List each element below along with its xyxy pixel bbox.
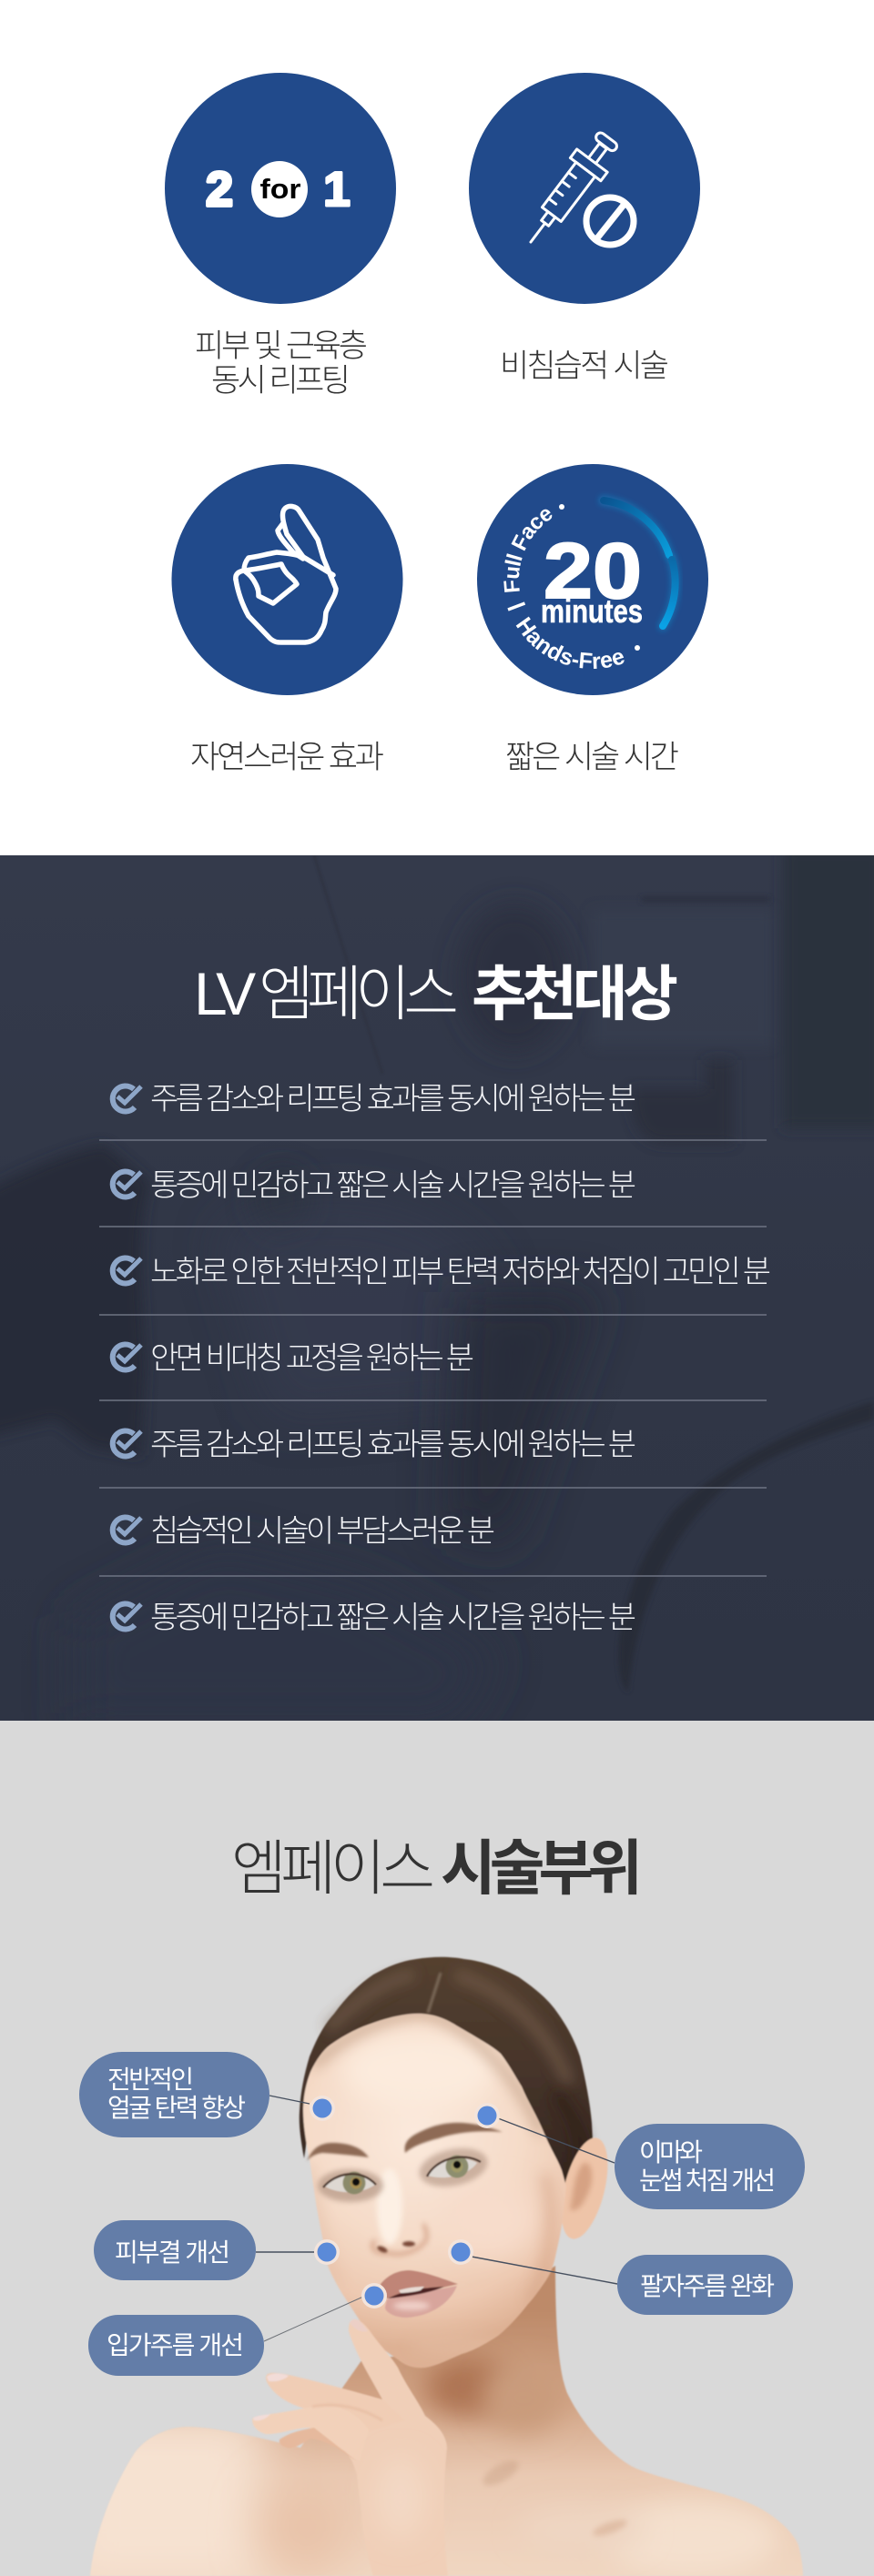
marker: nasolabial bbox=[448, 2239, 473, 2265]
icon: check 4 bbox=[113, 1344, 141, 1369]
list item 7: 통증에 민감하고 짧은 시술 시간을 원하는 분 bbox=[150, 1601, 636, 1635]
icon: 20 minutes full face hands-free badge: Full Face bbox=[503, 510, 552, 592]
icon: 20 minutes full face hands-free badge bbox=[477, 464, 708, 695]
panel: benefits bbox=[165, 73, 708, 775]
list item 1: 주름 감소와 리프팅 효과를 동시에 원하는 분 bbox=[150, 1082, 636, 1116]
panel: recommended candidates bbox=[0, 846, 874, 1729]
benefit 4: short treatment time bbox=[477, 464, 708, 775]
marker: mouth corner bbox=[361, 2283, 387, 2308]
title: LV empace recommended candidates: LV 엠페이스 bbox=[194, 960, 459, 1027]
label: skin and muscle lifting bbox=[195, 328, 368, 399]
hand bbox=[252, 2319, 448, 2576]
icon: 2 for 1 badge bbox=[165, 73, 396, 304]
callout: forehead and brow sagging: 눈썹 처짐 개선 bbox=[639, 2167, 776, 2195]
callout: nasolabial folds bbox=[617, 2255, 793, 2315]
marker: cheek bbox=[314, 2239, 340, 2265]
left eye bbox=[318, 2169, 383, 2202]
callout: overall facial elasticity bbox=[79, 2052, 269, 2137]
icon: 20 minutes full face hands-free badge: minutes bbox=[541, 592, 643, 630]
label: natural effect: 자연스러운 효과 bbox=[190, 740, 384, 775]
title: empace treatment areas: 엠페이스 bbox=[231, 1834, 435, 1902]
callout: marionette lines bbox=[88, 2315, 264, 2376]
list item 5: 주름 감소와 리프팅 효과를 동시에 원하는 분 bbox=[150, 1428, 636, 1462]
marker: forehead bbox=[310, 2096, 335, 2121]
panel: treatment areas bbox=[0, 1721, 874, 2576]
callout: skin texture: 피부결 개선 bbox=[115, 2238, 230, 2267]
background: light grey bbox=[0, 1721, 874, 2576]
icon: check 5 bbox=[113, 1430, 141, 1456]
icon: check 6 bbox=[113, 1517, 141, 1542]
list item 6: 침습적인 시술이 부담스러운 분 bbox=[150, 1514, 495, 1549]
background: white benefits area bbox=[0, 0, 874, 855]
benefit 1: 2 for 1 bbox=[165, 73, 396, 399]
illustration: woman's face, neck and shoulders bbox=[64, 1957, 803, 2576]
title: empace treatment areas bbox=[231, 1834, 643, 1902]
list item 3: 노화로 인한 전반적인 피부 탄력 저하와 처짐이 고민인 분 bbox=[150, 1255, 771, 1289]
body: neck and shoulders bbox=[64, 2266, 803, 2576]
icon: 20 minutes full face hands-free badge: Hands-Free bbox=[515, 617, 625, 669]
icon: syringe with prohibition sign bbox=[469, 73, 700, 304]
title: LV empace recommended candidates bbox=[194, 960, 678, 1027]
icon: check 7 bbox=[113, 1603, 141, 1629]
title: LV empace recommended candidates: 추천대상 bbox=[472, 960, 678, 1027]
icon: blue progress arc bbox=[604, 500, 676, 626]
icon: 2 for 1 badge: for bbox=[260, 173, 300, 205]
face bbox=[303, 2014, 566, 2368]
icon: 2 for 1 badge: 2 bbox=[206, 163, 233, 217]
icon: check 1 bbox=[113, 1086, 141, 1111]
icon: check 2 bbox=[113, 1171, 141, 1197]
nose bbox=[372, 2225, 427, 2254]
callout: overall facial elasticity: 전반적인 bbox=[107, 2066, 194, 2094]
title: empace treatment areas: 시술부위 bbox=[441, 1834, 643, 1902]
callout: forehead and brow sagging: 이마와 bbox=[639, 2138, 703, 2167]
label: non-invasive treatment: 비침습적 시술 bbox=[500, 349, 669, 384]
connector lines bbox=[256, 2096, 617, 2341]
callout: overall facial elasticity: 얼굴 탄력 향상 bbox=[107, 2094, 246, 2122]
icon: 20 minutes full face hands-free badge: 20 bbox=[544, 528, 642, 615]
icon: check 3 bbox=[113, 1258, 141, 1283]
list item 2: 통증에 민감하고 짧은 시술 시간을 원하는 분 bbox=[150, 1168, 636, 1203]
callout: marionette lines: 입가주름 개선 bbox=[107, 2331, 244, 2359]
eyebrows bbox=[307, 2123, 503, 2161]
callout: nasolabial folds: 팔자주름 완화 bbox=[640, 2272, 775, 2300]
background: dark blurred clinical photo bbox=[0, 846, 874, 1729]
callout: skin texture bbox=[94, 2220, 256, 2280]
marker: brow bbox=[474, 2103, 500, 2128]
dividers bbox=[99, 1140, 767, 1576]
label: skin and muscle lifting: 피부 및 근육층 bbox=[195, 328, 368, 364]
benefit 2: non-invasive bbox=[469, 73, 700, 384]
benefit 3: natural result bbox=[171, 464, 402, 775]
lips bbox=[381, 2270, 458, 2318]
hair bbox=[300, 1957, 593, 2188]
right eye bbox=[416, 2143, 491, 2192]
ear bbox=[553, 2133, 616, 2244]
list item 4: 안면 비대칭 교정을 원하는 분 bbox=[150, 1341, 474, 1376]
label: short treatment time: 짧은 시술 시간 bbox=[505, 740, 679, 775]
icon: OK hand gesture bbox=[171, 464, 402, 695]
callout: forehead and brow sagging bbox=[615, 2124, 805, 2209]
icon: 2 for 1 badge: 1 bbox=[323, 163, 351, 217]
label: skin and muscle lifting: 동시 리프팅 bbox=[211, 363, 351, 399]
